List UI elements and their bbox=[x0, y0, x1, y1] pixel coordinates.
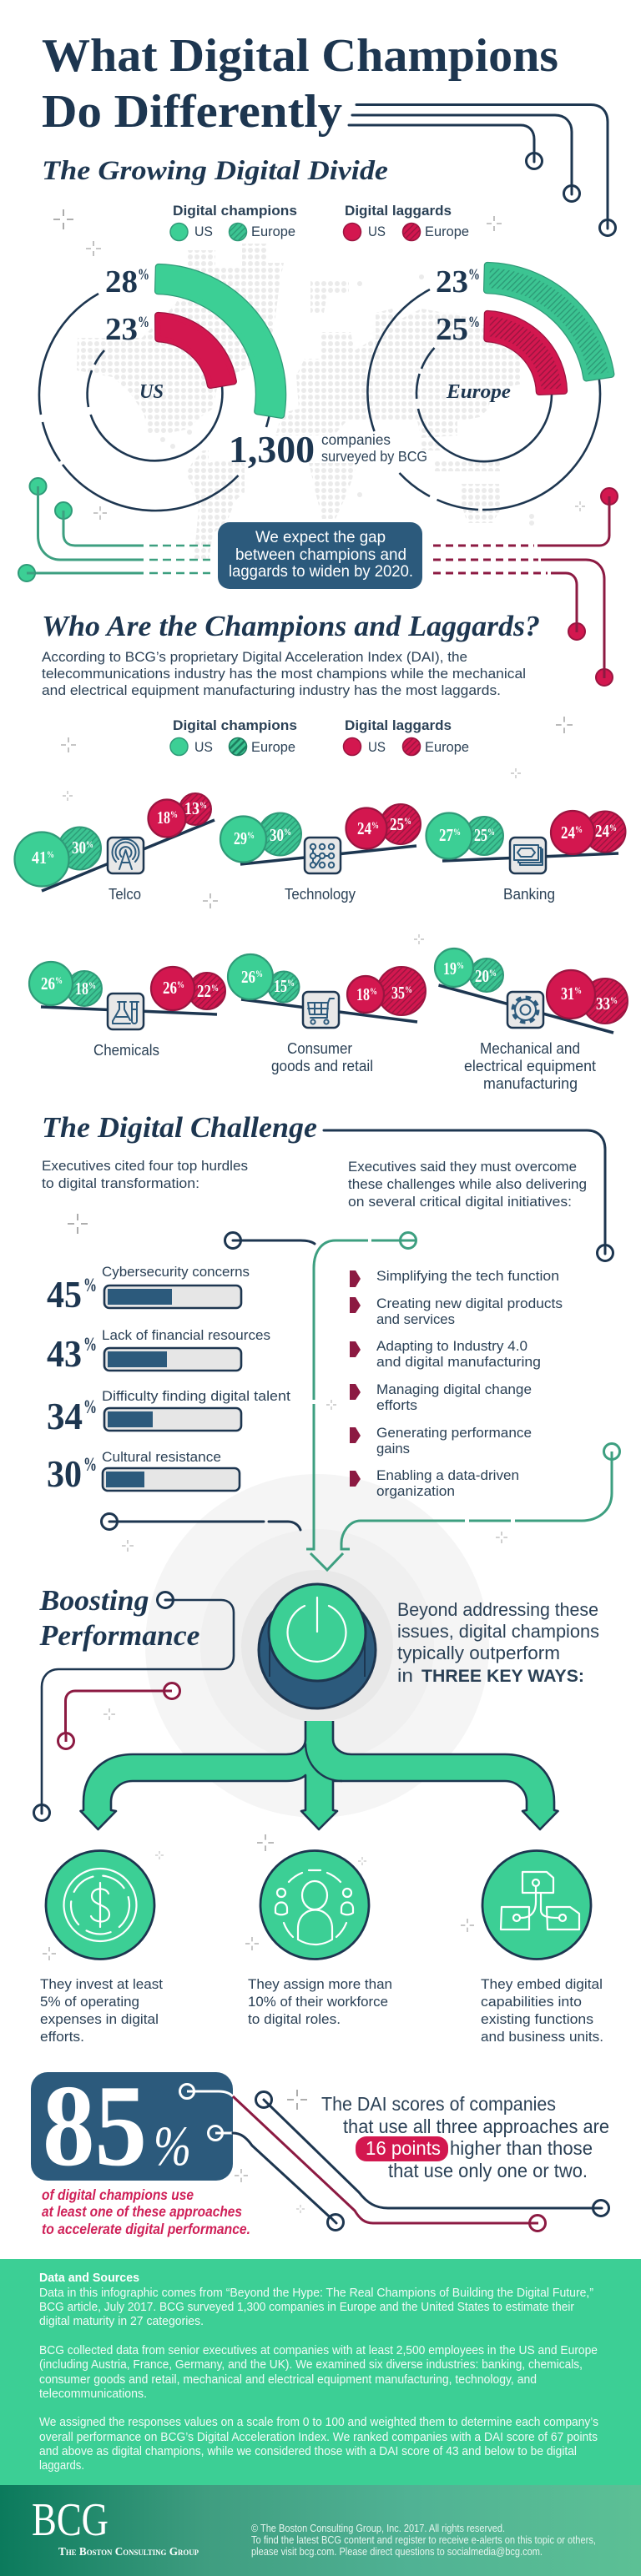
legend second: US bbox=[368, 739, 386, 755]
heading: boosting performance: Boosting bbox=[38, 1584, 149, 1617]
list: digital initiatives: and services bbox=[376, 1311, 455, 1327]
seesaw: mechanical and electrical equipment manufacturing bbox=[435, 948, 628, 1092]
seesaw: mechanical and electrical equipment manufacturing: 31 bbox=[561, 984, 574, 1004]
text: assign bbox=[248, 1976, 392, 2027]
crimson connector bbox=[58, 1683, 180, 1748]
text: invest: They invest at least bbox=[40, 1976, 163, 1992]
bar chart: top hurdles: % bbox=[83, 1454, 97, 1475]
seesaw: consumer goods and retail: Consumer bbox=[287, 1040, 352, 1057]
intro paragraph: and electrical equipment manufacturing industry has the most laggards. bbox=[42, 682, 501, 698]
panel: data and sources: (including Austria, France, Germany, and the UK). We examined six diverse industries: banking, chemicals, bbox=[39, 2358, 583, 2372]
US laggards arc bbox=[158, 315, 234, 385]
icon: dollar coin bbox=[63, 1869, 137, 1941]
title bbox=[42, 30, 558, 138]
text: beyond addressing: Beyond addressing these bbox=[397, 1599, 598, 1620]
icon: gear bbox=[507, 992, 543, 1028]
copyright bbox=[251, 2523, 596, 2558]
heading: the growing digital divide: The Growing Digital Divide bbox=[42, 156, 388, 186]
seesaw: chemicals bbox=[29, 962, 225, 1059]
chart: Europe donut: % bbox=[468, 266, 480, 284]
chart: US donut: % bbox=[138, 314, 149, 331]
seesaw: banking: % bbox=[453, 826, 461, 838]
stat: 1,300 companies bbox=[229, 428, 427, 470]
seesaw: chemicals: 22 bbox=[197, 981, 211, 1001]
seesaw: telco: % bbox=[47, 848, 54, 860]
text: DAI scores: that use all three approaches are bbox=[343, 2116, 609, 2137]
seesaw: technology: 30 bbox=[270, 825, 284, 845]
seesaw: technology: 29 bbox=[234, 828, 247, 848]
circuit lines from title bbox=[349, 105, 616, 235]
panel: data and sources: overall performance on BCG’s Digital Acceleration Index. We ranked companies with a DAI score of 67 points bbox=[39, 2431, 598, 2444]
intro right bbox=[348, 1159, 587, 1210]
caption: 85% of champions: of digital champions use bbox=[42, 2186, 194, 2203]
seesaw: technology: % bbox=[404, 815, 411, 827]
highlight pill: 16 points bbox=[356, 2136, 448, 2161]
intro paragraph: telecommunications industry has the most champions while the mechanical bbox=[42, 666, 526, 682]
navy connector from challenge heading bbox=[324, 1130, 613, 1261]
panel: data and sources: BCG collected data from senior executives at companies with at least 2,500 employees in the US and Europe bbox=[39, 2344, 598, 2357]
text: embed: and business units. bbox=[481, 2029, 603, 2045]
chart: Europe donut: % bbox=[468, 314, 480, 331]
icon: shopping cart bbox=[303, 992, 339, 1028]
panel: assign workforce bbox=[248, 1850, 392, 2027]
callout: gap will widen: laggards to widen by 2020. bbox=[229, 562, 413, 581]
seesaw: telco: % bbox=[199, 799, 207, 811]
seesaw: mechanical and electrical equipment manufacturing: % bbox=[457, 959, 464, 971]
red connector lines bbox=[433, 488, 618, 686]
text: invest: efforts. bbox=[40, 2029, 84, 2045]
legend top: US bbox=[194, 224, 213, 239]
text: assign: 10% of their workforce bbox=[248, 1994, 388, 2010]
Europe champions arc bbox=[487, 265, 611, 378]
text: beyond addressing bbox=[397, 1599, 599, 1686]
stat panel: 85%: % bbox=[154, 2114, 191, 2177]
seesaw: telco: 13 bbox=[184, 798, 199, 818]
text: embed bbox=[481, 1976, 603, 2045]
icon: power button bbox=[259, 1584, 376, 1708]
legend top: Europe bbox=[425, 224, 469, 239]
navy connector from boosting heading bbox=[33, 1592, 234, 1820]
panel: data and sources: laggards. bbox=[39, 2459, 84, 2473]
bar chart: top hurdles: Cybersecurity concerns bbox=[102, 1264, 250, 1280]
seesaw: consumer goods and retail: 15 bbox=[274, 976, 287, 996]
seesaw: mechanical and electrical equipment manufacturing: Mechanical and bbox=[480, 1040, 580, 1057]
seesaw: banking: % bbox=[609, 822, 617, 833]
caption: 85% of champions: at least one of these approaches bbox=[42, 2203, 242, 2220]
seesaw: telco: % bbox=[86, 838, 93, 850]
title: What Digital Champions bbox=[42, 30, 558, 82]
seesaw: telco: 18 bbox=[157, 808, 170, 828]
seesaw: consumer goods and retail: 18 bbox=[356, 984, 370, 1004]
intro right: Executives said they must overcome bbox=[348, 1159, 577, 1175]
bar chart: top hurdles: % bbox=[83, 1275, 97, 1296]
copyright: To find the latest BCG content and register to receive e-alerts on this topic or others, bbox=[251, 2534, 596, 2546]
text: embed: capabilities into bbox=[481, 1994, 582, 2010]
list: digital initiatives bbox=[350, 1268, 563, 1499]
intro right: these challenges while also delivering bbox=[348, 1176, 587, 1192]
text: DAI scores: higher than those bbox=[450, 2137, 593, 2159]
chart: US donut: 23 bbox=[105, 312, 138, 347]
logo: BCG: BCG bbox=[32, 2494, 109, 2546]
callout: gap will widen: We expect the gap bbox=[255, 528, 386, 546]
stat panel: 85% bbox=[31, 2061, 233, 2191]
legend second: Europe bbox=[425, 739, 469, 755]
text: invest: 5% of operating bbox=[40, 1994, 139, 2010]
chart: US donut: 28 bbox=[105, 264, 138, 299]
intro left bbox=[42, 1158, 248, 1191]
seesaw: consumer goods and retail: 26 bbox=[241, 967, 255, 987]
list: digital initiatives: Generating performance bbox=[376, 1425, 532, 1441]
seesaw: technology: 25 bbox=[390, 814, 404, 834]
seesaw: mechanical and electrical equipment manufacturing: electrical equipment bbox=[464, 1058, 596, 1074]
panel: data and sources: consumer goods and retail, mechanical and electrical equipment manufacturing, technology, and bbox=[39, 2373, 537, 2387]
panel: invest in digital bbox=[40, 1850, 163, 2045]
seesaw: banking bbox=[426, 811, 626, 903]
text: beyond addressing: issues, digital champions bbox=[397, 1621, 599, 1642]
chart: Europe donut bbox=[367, 264, 611, 510]
footer band bbox=[0, 2485, 641, 2576]
intro left: to digital transformation: bbox=[42, 1175, 199, 1191]
text: invest: expenses in digital bbox=[40, 2011, 159, 2027]
seesaw: telco: 41 bbox=[32, 848, 47, 868]
list: digital initiatives: Adapting to Industry 4.0 bbox=[376, 1338, 527, 1354]
navy stub connectors bbox=[102, 1233, 315, 1530]
bar chart: top hurdles: Cultural resistance bbox=[102, 1449, 221, 1465]
list: digital initiatives: Enabling a data-driven bbox=[376, 1467, 519, 1483]
chart: Europe donut: Europe bbox=[446, 381, 511, 403]
heading: boosting performance: Performance bbox=[38, 1619, 199, 1652]
seesaw: telco: Telco bbox=[109, 886, 141, 903]
heading: who are the champions and laggards: Who Are the Champions and Laggards? bbox=[42, 610, 540, 642]
circuit lines from 85% panel bbox=[180, 2084, 609, 2231]
seesaw: technology bbox=[220, 804, 421, 903]
text: beyond addressing: typically outperform bbox=[397, 1643, 560, 1663]
bar chart: top hurdles: % bbox=[83, 1396, 97, 1417]
heading: boosting performance bbox=[38, 1584, 200, 1652]
legend second: Digital champions bbox=[173, 717, 297, 733]
Europe laggards arc bbox=[487, 314, 564, 392]
bar chart: top hurdles: 34 bbox=[47, 1395, 83, 1437]
seesaw: banking: Banking bbox=[503, 886, 555, 903]
seesaw: consumer goods and retail: % bbox=[405, 984, 412, 995]
text: DAI scores: 16 points bbox=[366, 2137, 441, 2159]
seesaw: banking: 24 bbox=[595, 821, 609, 841]
caption: 85% of champions bbox=[42, 2186, 250, 2237]
panel: data and sources: telecommunications. bbox=[39, 2387, 147, 2401]
decorative sparkles bbox=[43, 209, 585, 2213]
seesaw: consumer goods and retail bbox=[228, 954, 426, 1074]
seesaw: banking: 25 bbox=[474, 825, 487, 845]
legend second bbox=[170, 717, 469, 756]
seesaw: consumer goods and retail: 35 bbox=[391, 983, 405, 1003]
seesaw: consumer goods and retail: goods and retail bbox=[271, 1058, 373, 1074]
stat panel: 85%: 85 bbox=[43, 2061, 147, 2191]
seesaw: chemicals: 18 bbox=[75, 979, 88, 999]
legend top: Digital laggards bbox=[345, 203, 452, 219]
text: DAI scores: The DAI scores of companies bbox=[321, 2093, 556, 2115]
seesaw: mechanical and electrical equipment manufacturing: 33 bbox=[596, 994, 610, 1014]
legend second: Digital laggards bbox=[345, 717, 452, 733]
intro paragraph: According to BCG’s proprietary Digital Acceleration Index (DAI), the bbox=[42, 649, 467, 665]
text: embed: existing functions bbox=[481, 2011, 593, 2027]
panel: embed capabilities bbox=[481, 1850, 603, 2045]
icon: telecom tower bbox=[108, 838, 144, 873]
logo: BCG: The Boston Consulting Group bbox=[58, 2545, 199, 2558]
seesaw: chemicals: % bbox=[55, 974, 63, 986]
panel: data and sources: We assigned the responses values on a scale from 0 to 100 and weighted them to determine each company’s bbox=[39, 2416, 598, 2429]
text: DAI scores bbox=[321, 2093, 609, 2181]
seesaw: mechanical and electrical equipment manufacturing: 19 bbox=[443, 958, 457, 979]
bar chart: top hurdles bbox=[47, 1264, 290, 1495]
stat: 1,300 companies: surveyed by BCG bbox=[321, 448, 427, 465]
seesaw: consumer goods and retail: % bbox=[287, 977, 295, 989]
seesaw: technology: % bbox=[371, 819, 379, 831]
text: assign: to digital roles. bbox=[248, 2011, 341, 2027]
seesaw: telco bbox=[15, 793, 215, 903]
bar chart: top hurdles: 43 bbox=[47, 1332, 82, 1375]
US champions arc bbox=[158, 267, 283, 415]
green arrows into power button bbox=[306, 1233, 619, 1570]
logo: BCG bbox=[32, 2494, 199, 2558]
text: beyond addressing: THREE KEY WAYS: bbox=[421, 1667, 584, 1686]
world map dot background bbox=[77, 244, 534, 561]
seesaw: mechanical and electrical equipment manufacturing: % bbox=[610, 994, 618, 1006]
bar chart: top hurdles: Lack of financial resources bbox=[102, 1327, 270, 1343]
chart: Europe donut: 25 bbox=[436, 312, 468, 347]
seesaw: technology: % bbox=[284, 826, 291, 838]
seesaw: chemicals: % bbox=[177, 979, 184, 990]
list: digital initiatives: Simplifying the tech function bbox=[376, 1268, 559, 1284]
intro left: Executives cited four top hurdles bbox=[42, 1158, 248, 1174]
seesaw: chemicals: 26 bbox=[41, 974, 55, 994]
legend top bbox=[170, 203, 469, 240]
callout: gap will widen: between champions and bbox=[235, 546, 406, 564]
seesaw: mechanical and electrical equipment manufacturing: 20 bbox=[475, 966, 489, 986]
caption: 85% of champions: to accelerate digital performance. bbox=[42, 2221, 250, 2237]
panel: data and sources: BCG article, July 2017. BCG surveyed 1,300 companies in Europe and the United States to estimate their bbox=[39, 2301, 574, 2314]
seesaw: chemicals: % bbox=[88, 979, 96, 991]
icon: flask and test tube bbox=[108, 994, 144, 1029]
seesaw: chemicals: 26 bbox=[163, 978, 177, 998]
list: digital initiatives: organization bbox=[376, 1483, 455, 1499]
callout: gap will widen bbox=[218, 522, 422, 589]
seesaw: mechanical and electrical equipment manufacturing: manufacturing bbox=[483, 1075, 578, 1092]
list: digital initiatives: gains bbox=[376, 1441, 410, 1457]
heading: the digital challenge: The Digital Challenge bbox=[42, 1111, 317, 1144]
intro right: on several critical digital initiatives: bbox=[348, 1194, 572, 1210]
seesaw: banking: % bbox=[575, 823, 583, 835]
legend top: US bbox=[368, 224, 386, 239]
seesaw: telco: % bbox=[170, 808, 178, 820]
arrow: three-way green fork bbox=[80, 1721, 558, 1829]
text: DAI scores: that use only one or two. bbox=[388, 2160, 588, 2181]
chart: US donut: US bbox=[139, 381, 164, 403]
seesaw: banking: 27 bbox=[439, 825, 453, 845]
legend second: Europe bbox=[251, 739, 295, 755]
stat: 1,300 companies: 1,300 bbox=[229, 428, 315, 470]
chart: Europe donut: 23 bbox=[436, 264, 468, 299]
panel: data and sources: and above as digital champions, while we considered those with a DAI score of 43 and below to be digital bbox=[39, 2445, 577, 2458]
seesaw: chemicals: % bbox=[211, 982, 219, 994]
panel: data and sources bbox=[0, 2259, 641, 2485]
text: beyond addressing: in bbox=[397, 1665, 413, 1686]
icon: circuit grid bbox=[305, 838, 341, 873]
stat: 1,300 companies: companies bbox=[321, 431, 391, 448]
icon: linked tags bbox=[501, 1872, 579, 1929]
list: digital initiatives: Creating new digital products bbox=[376, 1296, 563, 1311]
seesaw: banking: 24 bbox=[561, 823, 575, 843]
list: digital initiatives: Managing digital change bbox=[376, 1381, 532, 1397]
intro paragraph bbox=[42, 649, 526, 698]
text: embed: They embed digital bbox=[481, 1976, 603, 1992]
seesaw: technology: 24 bbox=[357, 818, 371, 838]
list: digital initiatives: and digital manufacturing bbox=[376, 1354, 541, 1370]
copyright: © The Boston Consulting Group, Inc. 2017. All rights reserved. bbox=[251, 2523, 505, 2534]
chart: US donut: % bbox=[138, 266, 149, 284]
chart: US donut bbox=[39, 264, 283, 511]
legend top: Europe bbox=[251, 224, 295, 239]
background concentric circles bbox=[145, 1474, 489, 1818]
list: digital initiatives: efforts bbox=[376, 1397, 417, 1413]
green connector lines bbox=[18, 478, 210, 581]
title: Do Differently bbox=[42, 86, 342, 138]
panel: data and sources: Data in this infographic comes from “Beyond the Hype: The Real Champions of Building the Digital Future,” bbox=[39, 2287, 593, 2300]
bar chart: top hurdles: % bbox=[83, 1334, 97, 1355]
bar chart: top hurdles: 45 bbox=[47, 1273, 82, 1316]
icon: people bbox=[275, 1870, 353, 1945]
text: invest bbox=[40, 1976, 163, 2045]
legend second: US bbox=[194, 739, 213, 755]
seesaw: consumer goods and retail: % bbox=[255, 968, 263, 979]
panel: data and sources: digital maturity in 27 categories. bbox=[39, 2315, 204, 2328]
seesaw: mechanical and electrical equipment manufacturing: % bbox=[574, 984, 582, 996]
panel: data and sources: Data and Sources bbox=[39, 2271, 139, 2285]
seesaw: mechanical and electrical equipment manufacturing: % bbox=[489, 967, 497, 979]
seesaw: telco: 30 bbox=[72, 838, 86, 858]
seesaw: technology: % bbox=[247, 829, 255, 841]
legend top: Digital champions bbox=[173, 203, 297, 219]
text: assign: They assign more than bbox=[248, 1976, 392, 1992]
seesaw: technology: Technology bbox=[285, 886, 356, 903]
seesaw: chemicals: Chemicals bbox=[93, 1042, 159, 1059]
bar chart: top hurdles: 30 bbox=[47, 1452, 82, 1495]
icon: stack of bills bbox=[510, 838, 546, 873]
seesaw: consumer goods and retail: % bbox=[370, 985, 377, 997]
copyright: please visit bcg.com. Please direct questions to socialmedia@bcg.com. bbox=[251, 2546, 543, 2558]
bar chart: top hurdles: Difficulty finding digital talent bbox=[102, 1388, 290, 1404]
seesaw: banking: % bbox=[487, 826, 495, 838]
